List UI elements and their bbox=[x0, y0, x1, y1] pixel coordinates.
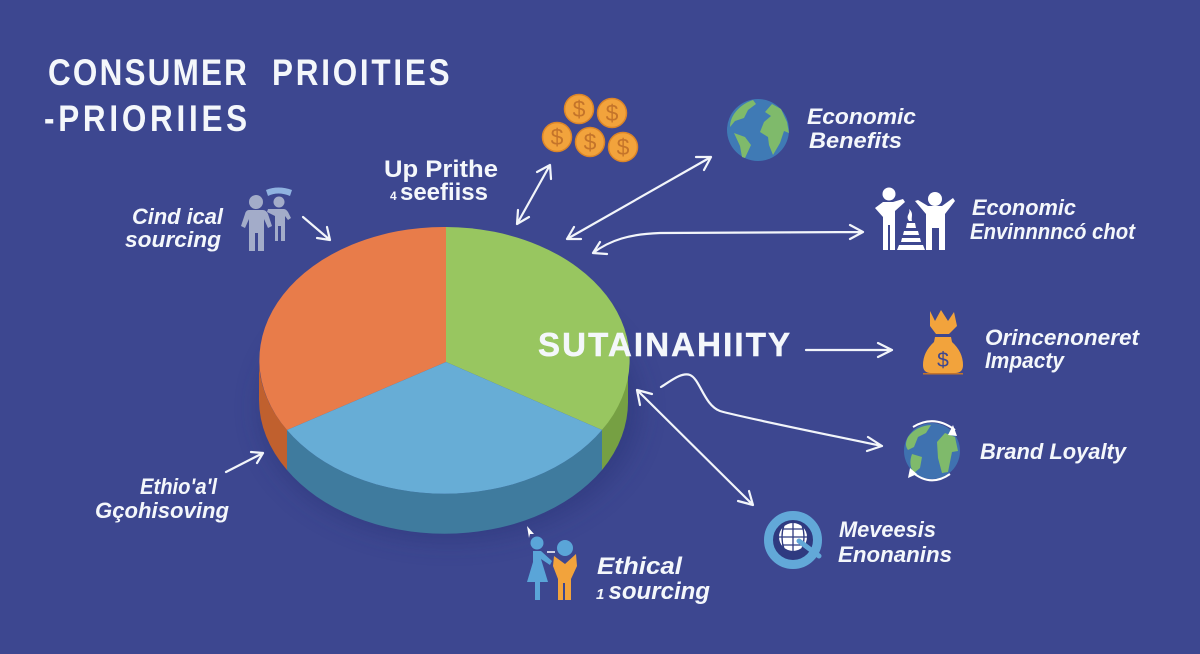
icon: magnifier globe bbox=[768, 516, 819, 564]
label: up prithe: 4 seefiiss bbox=[390, 179, 488, 206]
icon: coins: $ bbox=[606, 100, 619, 126]
title: -PRIORIIES bbox=[44, 99, 247, 140]
3D pie chart bbox=[259, 227, 640, 540]
label: ethical left: Gçohisoving bbox=[95, 498, 229, 523]
icon: two white people with tower bbox=[875, 188, 955, 250]
icon: money bag bbox=[923, 310, 963, 374]
arrow: coins to pie bbox=[517, 165, 551, 224]
label: cindical sourcing: sourcing bbox=[125, 227, 221, 252]
icon: globe bbox=[727, 99, 789, 161]
label: cindical sourcing bbox=[125, 204, 224, 252]
arrow: people to pie bbox=[593, 225, 863, 254]
icon: coins: $ bbox=[617, 134, 630, 160]
label: ethical left bbox=[95, 474, 229, 523]
icon: coins: $ bbox=[551, 124, 564, 150]
label: economic benefits bbox=[807, 104, 916, 153]
icon: coins: $ bbox=[584, 129, 597, 155]
arrow: pie to globe, curved bbox=[661, 374, 882, 451]
title: CONSUMER bbox=[48, 53, 247, 94]
label: meveesis enonanins: Enonanins bbox=[838, 542, 952, 567]
label: ethical sourcing bottom: 1 sourcing bbox=[596, 578, 710, 605]
icon: coins bbox=[542, 94, 638, 162]
label: brand loyalty: Brand Loyalty bbox=[980, 439, 1127, 464]
label: economic environment: Envinnnncó chot bbox=[970, 219, 1136, 244]
label: impact: Impacty bbox=[985, 348, 1065, 373]
arrow: sustainability to money bag bbox=[806, 343, 892, 357]
label: meveesis enonanins bbox=[838, 517, 952, 567]
label: ethical sourcing bottom: Ethical bbox=[597, 553, 683, 580]
label: economic environment bbox=[970, 195, 1136, 244]
icon: globe with loop bbox=[904, 421, 960, 480]
label: up prithe: Up Prithe bbox=[384, 156, 498, 183]
label: cindical sourcing: Cind ical bbox=[132, 204, 224, 229]
label: impact bbox=[985, 325, 1140, 373]
label: economic benefits: Economic bbox=[807, 104, 916, 129]
arrow: pie to magnifier bbox=[637, 390, 753, 505]
title: PRIOITIES bbox=[272, 53, 450, 94]
label: up prithe bbox=[384, 156, 498, 206]
label: ethical left: Ethio'a'l bbox=[140, 474, 218, 499]
label: economic environment: Economic bbox=[972, 195, 1076, 220]
title bbox=[44, 53, 450, 140]
icon: coins: $ bbox=[573, 96, 586, 122]
icon: cursor arrow bbox=[527, 526, 534, 538]
label: ethical sourcing bottom bbox=[596, 553, 710, 605]
arrow: ethical to pie bbox=[226, 452, 263, 472]
label: economic benefits: Benefits bbox=[809, 128, 902, 153]
arrow: cindical to pie bbox=[303, 217, 330, 240]
icon: two grey people bbox=[241, 188, 292, 251]
label: impact: Orincenoneret bbox=[985, 325, 1140, 350]
arrow: globe to pie bbox=[567, 157, 711, 239]
icon: blue and orange people bbox=[527, 536, 577, 600]
label: meveesis enonanins: Meveesis bbox=[839, 517, 936, 542]
icon: money bag: $ bbox=[937, 349, 949, 372]
label: sustainability: SUTAINAHIITY bbox=[538, 326, 790, 363]
